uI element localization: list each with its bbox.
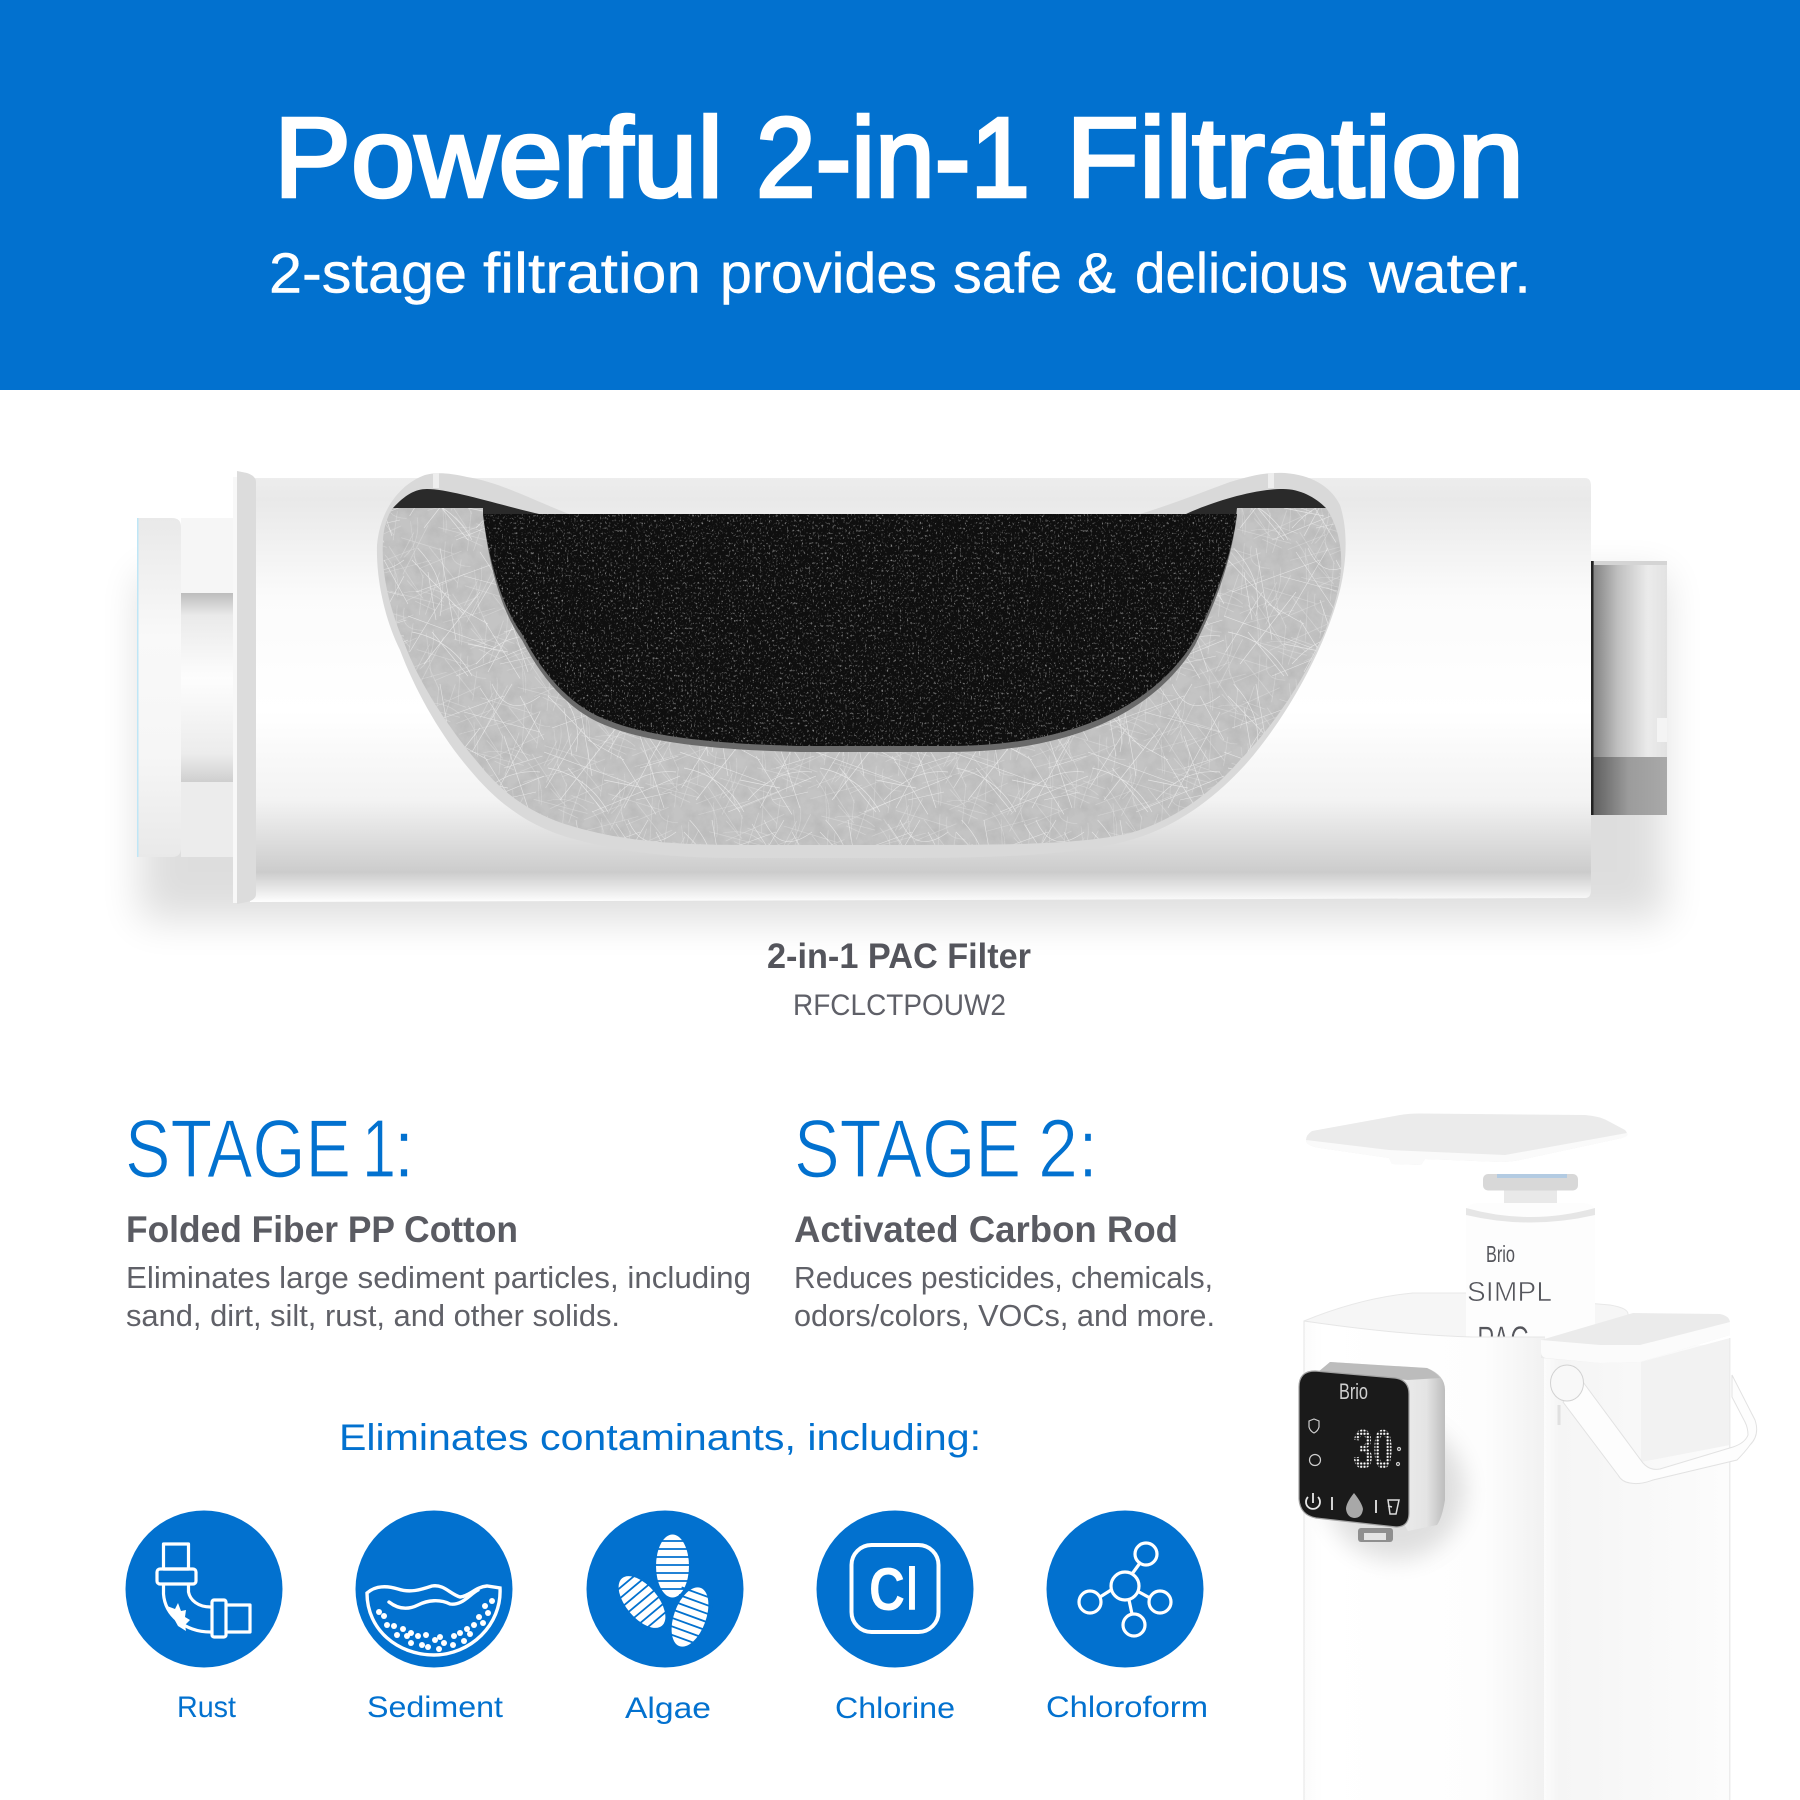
contaminant: chloroform <box>1046 1510 1208 1724</box>
stage 2 block <box>794 1102 1222 1333</box>
subtitle: safe <box>953 242 1062 306</box>
tank handle <box>1550 1365 1757 1484</box>
icon: chlorine symbol: C <box>869 1556 905 1623</box>
cartridge branding: Brio <box>1486 1241 1515 1267</box>
rear rim of dispenser <box>1304 1293 1640 1345</box>
header banner <box>0 0 1800 390</box>
left flange <box>237 471 256 904</box>
contaminants heading: Eliminates contaminants, including: <box>339 1417 981 1458</box>
icon: sediment bowl <box>356 1510 512 1668</box>
inner dark top sections <box>393 489 539 514</box>
label: algae: Algae <box>625 1692 711 1725</box>
timer digits: 30 <box>1353 1418 1393 1480</box>
cartridge branding: SIMPL <box>1467 1276 1552 1307</box>
cylinder body <box>250 478 1591 902</box>
filter name: 2-in-1 PAC Filter <box>767 937 1031 976</box>
label: rust: Rust <box>177 1691 237 1724</box>
stage 1 subheading: Folded Fiber PP Cotton <box>126 1209 518 1250</box>
main body front <box>1304 1321 1545 1800</box>
water dispenser product illustration <box>1299 1114 1757 1800</box>
subtitle: & <box>1077 242 1116 306</box>
filter caption <box>767 937 1031 1022</box>
subtitle: water. <box>1368 242 1531 306</box>
subtitle: delicious <box>1135 242 1348 306</box>
stage 1 fiber layer <box>375 500 1350 850</box>
label: chloroform: Chloroform <box>1046 1691 1208 1724</box>
icon: chlorine symbol <box>816 1510 974 1668</box>
water tank <box>1541 1313 1757 1800</box>
icon: chlorine symbol: l <box>906 1556 918 1623</box>
icon: algae cells <box>586 1510 744 1668</box>
subtitle: provides <box>720 242 937 306</box>
stage 2 description: odors/colors, VOCs, and more. <box>794 1298 1215 1333</box>
filter cartridge cutaway illustration <box>137 471 1667 920</box>
display screen <box>1299 1371 1409 1527</box>
stage 2 description: Reduces pesticides, chemicals, <box>794 1260 1213 1295</box>
title: Filtration <box>1066 94 1524 220</box>
subtitle: filtration <box>483 242 701 306</box>
removable filter cartridge <box>1466 1174 1595 1336</box>
top lid <box>1306 1114 1628 1165</box>
label: chlorine: Chlorine <box>835 1692 955 1725</box>
contaminant: sediment <box>356 1510 512 1724</box>
stage 1 heading: STAGE <box>125 1102 351 1195</box>
stage 2 carbon layer <box>480 514 1240 754</box>
display icons <box>1306 1419 1400 1514</box>
model number: RFCLCTPOUW2 <box>793 989 1006 1022</box>
control panel <box>1299 1362 1465 1560</box>
stage 1 description: Eliminates large sediment particles, including <box>126 1260 751 1295</box>
left cap and neck <box>137 518 235 857</box>
subtitle: 2-stage <box>269 242 467 306</box>
icon: rust pipe <box>126 1510 282 1668</box>
stage 1 description: sand, dirt, silt, rust, and other solids. <box>126 1298 620 1333</box>
stage 2 heading: STAGE <box>794 1102 1021 1195</box>
icon: molecule <box>1046 1510 1204 1668</box>
contaminant: chlorine <box>816 1510 974 1725</box>
chrome housing <box>1320 1362 1445 1531</box>
cartridge branding: PAC <box>1477 1319 1529 1363</box>
stage 1 heading: 1 <box>362 1102 396 1195</box>
stage 2 heading: 2: <box>1038 1102 1098 1195</box>
stage 2 subheading: Activated Carbon Rod <box>794 1209 1178 1250</box>
label: sediment: Sediment <box>367 1691 504 1724</box>
dispense drop <box>1346 1493 1363 1518</box>
faucet nozzle <box>1358 1528 1393 1542</box>
contaminant: rust <box>126 1510 282 1724</box>
display brand: Brio <box>1339 1379 1368 1404</box>
title: 2-in-1 <box>756 94 1030 220</box>
right connector stub <box>1591 561 1667 815</box>
stage 1 block <box>125 1102 760 1333</box>
contaminant: algae <box>586 1510 744 1725</box>
stage 1 heading: : <box>393 1102 415 1195</box>
cartridge branding <box>1468 1245 1551 1336</box>
cutaway shell rim <box>377 473 1346 858</box>
title: Powerful <box>274 94 723 220</box>
tank lid <box>1541 1313 1730 1363</box>
